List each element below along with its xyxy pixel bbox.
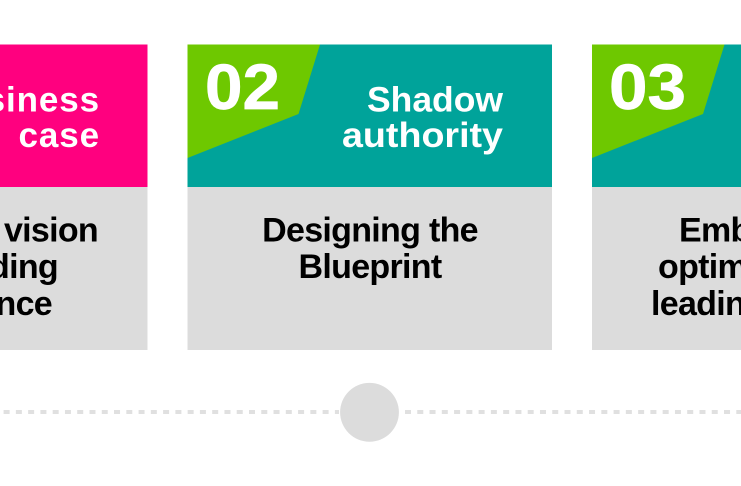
step 03 description bbox=[651, 212, 741, 323]
step 02 title: Shadow bbox=[367, 80, 504, 120]
step 02 header bbox=[188, 44, 552, 187]
step 02 title: authority bbox=[342, 116, 504, 155]
step 01 body background bbox=[0, 187, 148, 350]
panel: step 03 bbox=[592, 44, 741, 350]
step 01 title: case bbox=[19, 116, 100, 155]
step 01 description bbox=[0, 212, 98, 323]
step 02 number badge bbox=[188, 44, 320, 158]
panel: step 02 shadow authority bbox=[188, 44, 552, 350]
step 02 description bbox=[262, 212, 478, 286]
step 01 title bbox=[0, 80, 100, 155]
step 02 number: 02 bbox=[205, 51, 280, 123]
step 02 title bbox=[342, 80, 504, 155]
step 02 description: Blueprint bbox=[299, 248, 442, 286]
step 03 number badge bbox=[592, 44, 724, 158]
step 01 header bbox=[0, 44, 148, 187]
panel: step 01 business case bbox=[0, 44, 148, 350]
step 02 body background bbox=[188, 187, 552, 350]
step 01 description: vision bbox=[4, 212, 98, 250]
timeline marker bbox=[340, 383, 399, 442]
step 02 description: Designing the bbox=[262, 212, 478, 250]
timeline bbox=[4, 383, 741, 442]
step 03 body background bbox=[592, 187, 741, 350]
step 03 number: 03 bbox=[609, 51, 686, 123]
step 03 header bbox=[592, 44, 741, 187]
